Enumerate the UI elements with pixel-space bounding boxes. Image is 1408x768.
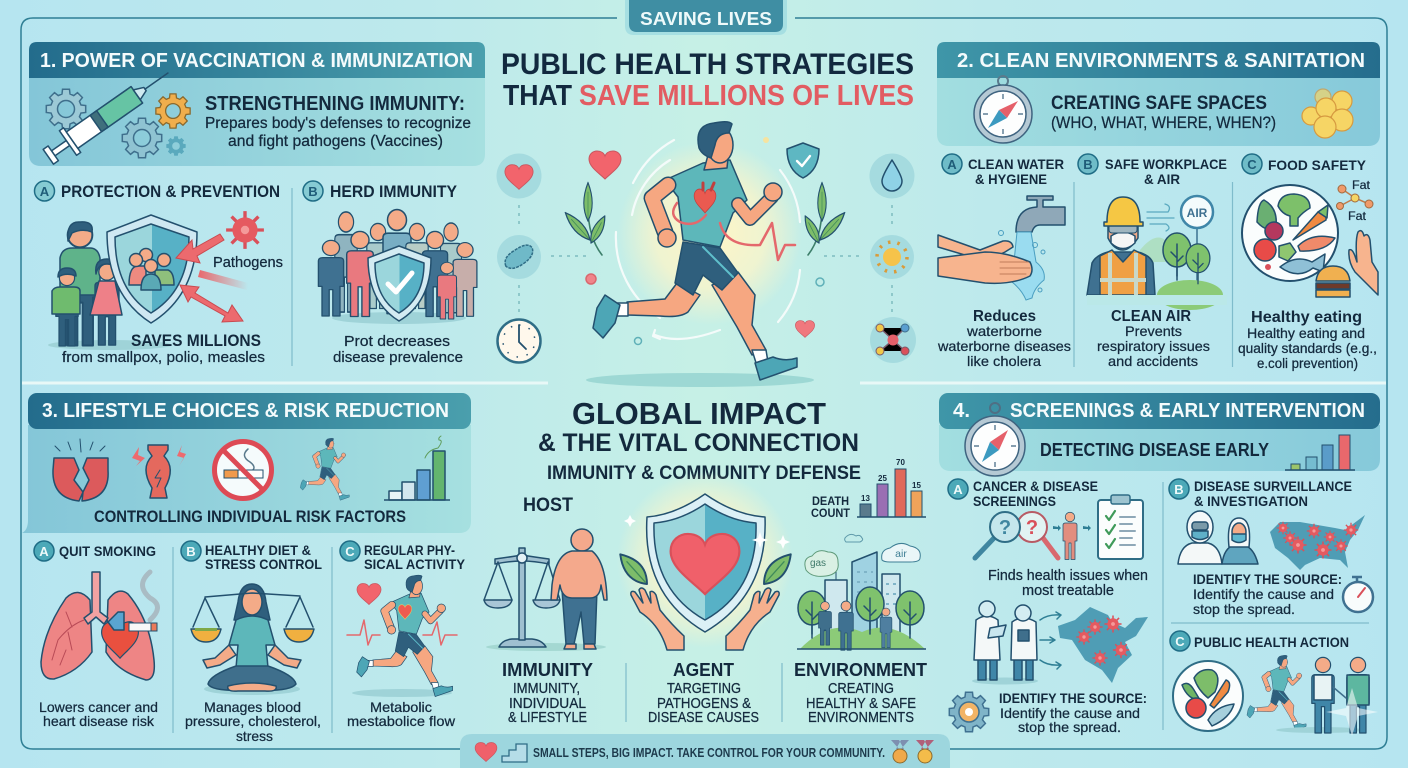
icon: compass xyxy=(965,403,1025,476)
text: identify source left: Identify the cause and xyxy=(1000,705,1140,721)
sub-head C: public health action: C xyxy=(1175,634,1185,649)
sub-head B: safe workplace xyxy=(1078,154,1227,187)
text: reduces: waterborne diseases xyxy=(937,338,1071,354)
header 2 xyxy=(937,42,1380,78)
tab: saving lives xyxy=(625,0,787,35)
illustration: shield with heart and hands xyxy=(614,472,797,650)
sub-head C: activity: REGULAR PHY- xyxy=(364,543,455,558)
illustration: hazmat workers and US map xyxy=(1178,511,1365,570)
subpanel: strengthening immunity: Prepares body's defenses to recognize xyxy=(205,115,471,132)
icon: medals xyxy=(891,740,934,763)
sub-head B: surveillance: & INVESTIGATION xyxy=(1194,494,1308,509)
text: herd immunity result: disease prevalence xyxy=(333,349,463,366)
icon: heart xyxy=(475,742,497,762)
sub-head B: safe workplace: SAFE WORKPLACE xyxy=(1105,156,1227,172)
text: clean air: Prevents xyxy=(1125,323,1182,339)
header 4: 4. xyxy=(953,399,970,422)
text: identify source left: IDENTIFY THE SOURCE: xyxy=(999,690,1147,706)
sub-head B: diet: B xyxy=(186,544,196,559)
column: immunity: IMMUNITY, xyxy=(513,681,580,697)
icon: cracked vase xyxy=(132,445,186,498)
icon: rising bars xyxy=(384,436,450,500)
heading: global impact: & THE VITAL CONNECTION xyxy=(538,429,859,457)
icon: running person xyxy=(300,438,349,500)
text: identify source right: IDENTIFY THE SOURCE: xyxy=(1193,571,1342,587)
column: agent: PATHOGENS & xyxy=(657,696,751,712)
text: diet result: Manages blood xyxy=(204,699,301,715)
sub-head B: diet xyxy=(181,541,322,572)
icon circle: bacterium xyxy=(497,235,541,279)
sub-head A: cancer screenings: SCREENINGS xyxy=(973,494,1056,509)
column: agent: DISEASE CAUSES xyxy=(648,710,759,726)
subpanel: controlling risk factors xyxy=(22,425,471,533)
illustration: magnifiers, person, checklist xyxy=(975,495,1143,560)
illustration: vaccination people xyxy=(1276,657,1378,736)
text: quit smoking result: heart disease risk xyxy=(43,713,155,729)
pulse lines xyxy=(673,203,795,260)
icon: gear with pathogen xyxy=(949,692,989,732)
sub-head C: public health action xyxy=(1170,631,1349,651)
icon: small heart xyxy=(795,321,815,337)
text: reduces: like cholera xyxy=(967,353,1041,369)
text: diet result: pressure, cholesterol, xyxy=(185,713,321,729)
sub-head A: clean water: CLEAN WATER xyxy=(968,156,1064,172)
sub-head C: food safety: C xyxy=(1247,157,1257,172)
text: reduces xyxy=(937,308,1071,369)
chart: death count: COUNT xyxy=(811,508,850,520)
text: diet result: stress xyxy=(236,728,273,744)
sub-head A: clean water xyxy=(942,154,1064,187)
subpanel: controlling risk factors: CONTROLLING INDIVIDUAL RISK FACTORS xyxy=(94,508,406,526)
panel 4: screenings xyxy=(939,393,1380,736)
illustration: magnifiers, person, checklist: ? xyxy=(1026,517,1038,539)
chart: death count: 25 xyxy=(878,474,887,483)
sub-head B: surveillance: DISEASE SURVEILLANCE xyxy=(1194,479,1352,494)
icon: stopwatch xyxy=(1343,577,1373,612)
sub-head C: food safety: FOOD SAFETY xyxy=(1268,157,1367,173)
icon: syringe xyxy=(40,61,177,169)
text: call to action: SMALL STEPS, BIG IMPACT. TAKE CONTROL FOR YOUR COMMUNITY. xyxy=(533,745,885,760)
column: environment: ENVIRONMENTS xyxy=(808,710,914,726)
header 3 xyxy=(28,393,471,429)
text: reduces: waterborne xyxy=(966,323,1042,339)
subpanel: detecting disease xyxy=(939,425,1380,471)
sub-head A: cancer screenings: CANCER & DISEASE xyxy=(973,479,1098,494)
connector dots left and right xyxy=(519,205,892,312)
sub-head A: protection: A xyxy=(40,184,50,199)
icon: right sprig xyxy=(801,183,848,255)
subpanel: strengthening immunity: STRENGTHENING IMMUNITY: xyxy=(205,93,465,115)
text: pathogens: Pathogens xyxy=(213,255,283,271)
chart: death count xyxy=(811,458,926,520)
sub-head A: cancer screenings xyxy=(948,479,1098,509)
illustration: city and environment: air xyxy=(895,548,907,560)
sub-head A: quit smoking: A xyxy=(39,544,49,559)
subpanel: creating safe spaces xyxy=(937,78,1380,146)
text: identify source right xyxy=(1193,571,1342,617)
text: herd immunity result: Prot decreases xyxy=(344,333,450,350)
sub-head C: food safety xyxy=(1242,154,1367,174)
column: environment xyxy=(794,660,927,726)
column: environment: ENVIRONMENT xyxy=(794,660,927,680)
text: saves millions: from smallpox, polio, measles xyxy=(62,349,265,366)
sub-head A: protection: PROTECTION & PREVENTION xyxy=(61,182,280,201)
chart: death count: 70 xyxy=(896,458,905,467)
center hero: runner xyxy=(496,122,916,387)
sub-head C: activity: SICAL ACTIVITY xyxy=(364,557,465,572)
icon: shield check xyxy=(787,143,819,178)
text: clean air: respiratory issues xyxy=(1097,338,1210,354)
header 4: SCREENINGS & EARLY INTERVENTION xyxy=(1010,399,1365,422)
main title: THAT xyxy=(503,80,572,112)
text: identify source left xyxy=(999,690,1147,735)
panel 3: lifestyle xyxy=(22,393,471,744)
header 4 xyxy=(939,393,1380,429)
chart: death count: 13 xyxy=(861,494,870,503)
icon: protective shield xyxy=(107,215,197,323)
heading: global impact: GLOBAL IMPACT xyxy=(572,397,826,431)
illustration: scientists and outbreak map xyxy=(972,601,1148,684)
text: activity result: mestabolice flow xyxy=(347,713,456,729)
text: activity result: Metabolic xyxy=(370,699,432,715)
column: environment: HEALTHY & SAFE xyxy=(806,696,916,712)
illustration: lungs and heart with cigarette xyxy=(41,572,158,680)
sub-head B: diet: STRESS CONTROL xyxy=(205,557,322,572)
illustration: city and environment: gas xyxy=(810,558,826,569)
text: healthy eating: quality standards (e.g., xyxy=(1238,341,1377,356)
icon circle: heart xyxy=(496,154,542,198)
runner figure xyxy=(593,122,797,380)
icon: fat cells xyxy=(1302,89,1353,138)
text: finds issues: most treatable xyxy=(1022,583,1114,599)
column: agent: TARGETING xyxy=(667,681,741,697)
illustration: city and environment xyxy=(797,534,926,650)
main title: SAVE MILLIONS OF LIVES xyxy=(579,80,914,112)
header 2: 2. CLEAN ENVIRONMENTS & SANITATION xyxy=(957,49,1365,72)
text: identify source right: stop the spread. xyxy=(1193,601,1295,617)
column: immunity xyxy=(502,660,593,726)
label: host: HOST xyxy=(523,495,573,516)
header 1 xyxy=(29,42,485,78)
sub-head C: activity xyxy=(340,541,465,572)
column: environment: CREATING xyxy=(828,681,894,697)
sub-head B: surveillance xyxy=(1169,479,1352,509)
icon circle: sun xyxy=(870,235,914,279)
heading: global impact xyxy=(538,397,861,484)
illustration: meditation and balance scale xyxy=(191,584,314,695)
text: clean air: and accidents xyxy=(1108,353,1198,369)
illustration: worker, air sign, trees xyxy=(1087,196,1227,310)
text: activity result xyxy=(347,699,456,729)
tab: saving lives: SAVING LIVES xyxy=(640,9,772,29)
dots xyxy=(586,137,824,344)
text: finds issues: Finds health issues when xyxy=(988,568,1148,584)
illustration: family behind shield xyxy=(48,222,172,350)
main title xyxy=(501,48,914,112)
ground shadow xyxy=(586,373,814,387)
sub-head C: activity: C xyxy=(345,544,355,559)
main title: PUBLIC HEALTH STRATEGIES xyxy=(501,48,914,81)
illustration: runner with heart and pulse xyxy=(347,575,457,697)
icon circle: molecule xyxy=(870,317,916,363)
column: agent xyxy=(648,660,759,726)
subpanel: creating safe spaces: (WHO, WHAT, WHERE, WHEN?) xyxy=(1051,113,1276,132)
sub-head A: clean water: A xyxy=(947,157,957,172)
sub-head A: quit smoking xyxy=(34,541,156,561)
sub-head B: herd immunity: HERD IMMUNITY xyxy=(330,182,458,201)
panel 1: vaccination xyxy=(29,42,485,366)
icon: gears xyxy=(46,89,190,158)
text: identify source left: stop the spread. xyxy=(1018,719,1121,735)
column: immunity: INDIVIDUAL xyxy=(509,696,586,712)
sub-head A: quit smoking: QUIT SMOKING xyxy=(59,544,156,559)
heart on chest xyxy=(694,183,716,213)
illustration: healthy plate xyxy=(1173,661,1243,731)
icon: heart xyxy=(589,151,621,179)
chart: death count: 15 xyxy=(912,481,921,490)
icon: left sprig xyxy=(562,183,609,255)
text: clean air xyxy=(1097,308,1210,369)
panel 2: clean environments xyxy=(937,42,1380,371)
icon circle: water drop xyxy=(870,154,914,198)
sub-head B: diet: HEALTHY DIET & xyxy=(205,543,311,558)
subpanel: strengthening immunity: and fight pathogens (Vaccines) xyxy=(228,133,443,150)
illustration: herd crowd with shield xyxy=(318,210,477,324)
center lower: global impact xyxy=(484,397,927,726)
icon: clock xyxy=(498,320,540,362)
subpanel: strengthening immunity xyxy=(29,78,485,166)
illustration: runner xyxy=(1247,655,1306,730)
icon: no smoking xyxy=(213,440,273,500)
subpanel: creating safe spaces: CREATING SAFE SPACES xyxy=(1051,92,1267,114)
header 3: 3. LIFESTYLE CHOICES & RISK REDUCTION xyxy=(42,399,449,422)
text: reduces: Reduces xyxy=(973,308,1036,325)
text: identify source right: Identify the cause and xyxy=(1193,586,1334,602)
sub-head A: clean water: & HYGIENE xyxy=(975,171,1047,187)
text: healthy eating: Healthy eating xyxy=(1251,309,1362,326)
illustration: healthy plate, burger, hand: Fat xyxy=(1352,178,1371,192)
icon: broken heart xyxy=(53,439,108,501)
icon: steps xyxy=(502,744,527,762)
text: saves millions xyxy=(62,331,265,366)
sub-head B: surveillance: B xyxy=(1174,482,1184,497)
sub-head B: herd immunity: B xyxy=(308,184,318,199)
heading: global impact: IMMUNITY & COMMUNITY DEFENSE xyxy=(547,463,861,484)
column: immunity: IMMUNITY xyxy=(502,660,593,680)
illustration: host scale and person xyxy=(484,529,607,651)
header 1: 1. POWER OF VACCINATION & IMMUNIZATION xyxy=(40,49,473,72)
sub-head A: cancer screenings: A xyxy=(953,482,963,497)
text: healthy eating: e.coli prevention) xyxy=(1257,356,1358,371)
illustration: worker, air sign, trees: AIR xyxy=(1187,206,1208,220)
illustration: healthy plate, burger, hand: Fat xyxy=(1348,209,1367,223)
text: diet result xyxy=(185,699,321,744)
text: herd immunity result xyxy=(333,333,463,366)
chart: rising bars xyxy=(1285,435,1355,470)
illustration: tap and hand washing xyxy=(938,196,1065,300)
sub-head C: public health action: PUBLIC HEALTH ACTION xyxy=(1194,634,1349,650)
arrows: pathogen attack xyxy=(176,234,248,322)
text: quit smoking result xyxy=(39,699,158,729)
text: quit smoking result: Lowers cancer and xyxy=(39,699,158,715)
text: finds issues xyxy=(988,568,1148,599)
text: healthy eating: Healthy eating and xyxy=(1247,326,1365,341)
text: clean air: CLEAN AIR xyxy=(1111,308,1191,325)
illustration: magnifiers, person, checklist: ? xyxy=(999,517,1011,539)
chart: death count: DEATH xyxy=(812,496,849,508)
icon: pathogen virus xyxy=(226,211,264,249)
sub-head B: safe workplace: & AIR xyxy=(1144,171,1180,187)
column: agent: AGENT xyxy=(673,660,734,680)
sub-head B: safe workplace: B xyxy=(1083,157,1093,172)
text: saves millions: SAVES MILLIONS xyxy=(131,331,261,350)
subpanel: detecting disease: DETECTING DISEASE EARLY xyxy=(1040,440,1269,460)
icon: compass xyxy=(974,76,1032,143)
column: immunity: & LIFESTYLE xyxy=(508,710,587,726)
glow and motion arcs xyxy=(616,140,802,339)
text: healthy eating xyxy=(1238,309,1377,371)
bottom banner xyxy=(460,734,950,768)
illustration: healthy plate, burger, hand xyxy=(1242,178,1378,297)
